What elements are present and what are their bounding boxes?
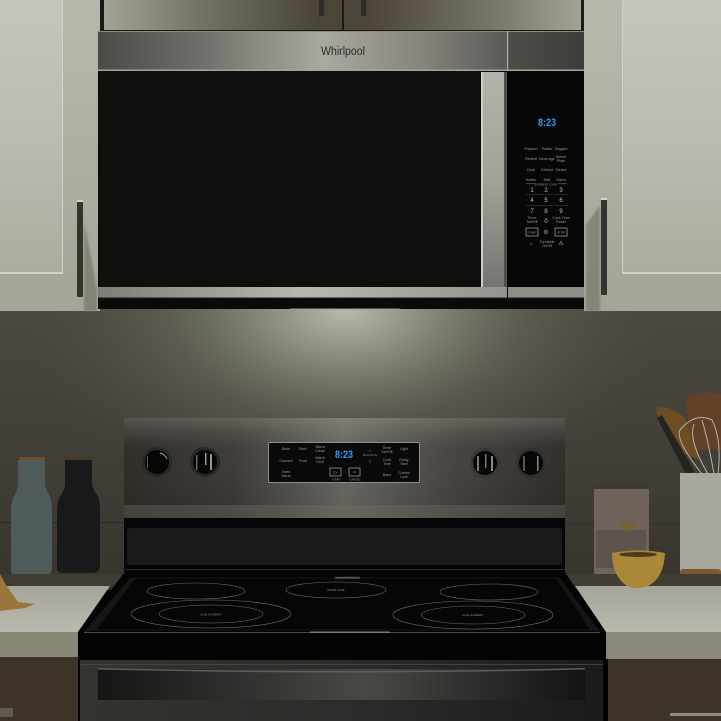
microwave control panel: Power: [556, 220, 567, 224]
start and stop buttons: [526, 228, 567, 236]
microwave control panel: 4: [530, 198, 534, 204]
under-microwave light strip: [290, 308, 400, 310]
microwave control panel: 1: [530, 188, 534, 194]
microwave control panel: Defrost: [541, 168, 553, 172]
wooden spoons: [686, 393, 721, 450]
burner labels: [200, 588, 484, 617]
microwave control panel: Dishes: [556, 168, 567, 172]
range control panel: Control: [398, 471, 410, 475]
start and cancel buttons: ×: [353, 470, 356, 476]
oven door: [80, 660, 603, 721]
microwave control panel: Melt: [544, 178, 550, 182]
knob far right: [516, 448, 546, 478]
microwave control panel: 7: [530, 209, 534, 215]
range control panel: Warm: [315, 456, 325, 460]
bottom trim: [98, 287, 584, 298]
burner labels: DUAL ELEMENT: [200, 612, 222, 616]
microwave control panel: Veggies: [555, 147, 568, 151]
right countertop: [566, 550, 721, 721]
range control panel: △: [369, 448, 373, 452]
microwave control panel: ☼: [529, 241, 533, 247]
folded cloth: [0, 574, 35, 611]
microwave control panel: 8: [544, 209, 548, 215]
left countertop decor bottles: [11, 457, 100, 576]
yellow bowl: [612, 550, 665, 588]
start and cancel buttons: [330, 468, 361, 482]
microwave control panel: 5: [544, 198, 548, 204]
clock display: 8:23: [538, 117, 556, 129]
start and cancel buttons: ▷: [334, 470, 338, 476]
grey bottle: [11, 457, 52, 576]
burners: [131, 582, 553, 629]
microwave top vent band: [98, 31, 584, 71]
microwave control panel: Cook: [527, 168, 535, 172]
start and stop buttons: START: [527, 230, 537, 234]
knob left: [190, 447, 220, 477]
range clock display: 8:23: [335, 449, 353, 461]
microwave control panel: Turntable: [539, 240, 555, 244]
range control panel: Warm: [281, 474, 291, 478]
range control panel: Delay: [399, 458, 409, 462]
brand logo: Whirlpool: [321, 46, 365, 58]
rear range body: [124, 518, 565, 572]
electric range: [78, 418, 605, 721]
microwave control panel: Popcorn: [524, 147, 538, 151]
microwave control panel: Beverage: [539, 157, 555, 161]
range control panel: Warm: [315, 445, 325, 449]
backsplash wall: [0, 110, 721, 590]
microwave control panel: 2: [544, 188, 548, 194]
right countertop decor: [594, 393, 721, 584]
whisk: [679, 418, 719, 474]
microwave control panel: 3: [559, 188, 563, 194]
range control panel: Set/Off: [381, 450, 393, 454]
range control panel: Frost: [299, 459, 307, 463]
start and stop buttons: STOP: [557, 230, 565, 234]
burner labels: DUAL ELEMENT: [462, 613, 484, 617]
cabinet handle right: [601, 198, 607, 295]
microwave control panel: Reheat: [525, 157, 537, 161]
range control panel: Cook: [383, 458, 391, 462]
lower cabinet left: [0, 657, 78, 721]
range control panel: Time: [383, 462, 391, 466]
lower cabinet right: [608, 659, 721, 721]
oven handle: [98, 668, 585, 700]
range control panel: Timer: [382, 446, 392, 450]
microwave control panel: Warm: [556, 178, 566, 182]
right upper cabinet: [584, 0, 721, 311]
microwave control panel: On/Off: [542, 244, 552, 248]
range control panel: Convect: [279, 459, 293, 463]
microwave control panel: Soften: [526, 178, 536, 182]
microwave control panel: 0: [544, 219, 548, 225]
microwave control panel: Potato: [542, 147, 552, 151]
microwave control panel: ⚙: [543, 229, 549, 236]
range control panel: Broil: [299, 447, 307, 451]
range control panel: Bake: [383, 473, 391, 477]
range control panel: Lock: [400, 475, 408, 479]
range control panel: ▽: [369, 460, 373, 464]
range control panel: Start: [400, 462, 408, 466]
start and cancel buttons: START: [332, 478, 341, 482]
microwave control panel: Set/Off: [526, 220, 538, 224]
range control panel: Light: [400, 447, 408, 451]
microwave control panel: Timer: [527, 216, 537, 220]
range control panel: Hold: [316, 460, 324, 464]
range control panel: [268, 442, 420, 482]
tin canister: [594, 486, 649, 578]
utensil crock: [680, 473, 721, 584]
range control panel: Oven: [282, 470, 290, 474]
microwave control panel: Cook Time: [552, 216, 570, 220]
knob right: [470, 448, 500, 478]
black bottle: [57, 457, 100, 573]
left countertop: [0, 574, 125, 721]
tongs: [657, 415, 695, 474]
microwave: [98, 31, 584, 310]
microwave door window: [99, 71, 480, 287]
microwave control panel: Dinner: [556, 155, 567, 159]
range control panel: Clean: [315, 449, 325, 453]
microwave control panel: 6: [559, 198, 563, 204]
range control panel: Temp/Time: [363, 453, 378, 457]
start and cancel buttons: CANCEL: [349, 478, 361, 482]
backguard: [124, 418, 565, 518]
cooktop: [78, 572, 605, 660]
door handle: [481, 72, 507, 287]
burner labels: WARM ZONE: [327, 588, 345, 592]
microwave control panel: EXPRESS COOK: [535, 182, 557, 186]
cabinet above microwave: [100, 0, 584, 31]
microwave control panel: 9: [559, 209, 563, 215]
left upper cabinet: [0, 0, 100, 311]
range control panel: Bake: [282, 447, 290, 451]
cabinet handle left: [77, 200, 83, 297]
microwave control panel: [508, 71, 584, 287]
knob far left: [142, 447, 172, 477]
microwave control panel: Plate: [557, 159, 565, 163]
microwave control panel: ⁂: [558, 241, 564, 247]
